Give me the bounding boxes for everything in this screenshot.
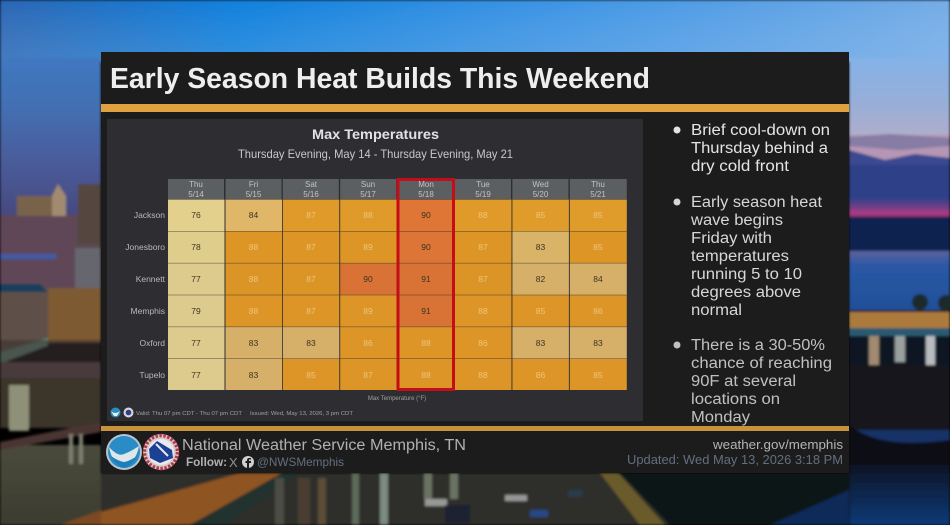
light temperature values: 89 [363, 306, 373, 316]
bullet 3 [674, 337, 832, 426]
column headers: Wed [532, 180, 549, 189]
dark temperature values: 83 [306, 338, 316, 348]
icon: small NWS logo [124, 408, 134, 418]
column headers: 5/18 [418, 190, 434, 199]
light temperature values: 88 [249, 274, 258, 284]
column headers: 5/20 [533, 190, 549, 199]
light temperature values: 87 [478, 242, 488, 252]
icon: NOAA logo [106, 434, 142, 470]
chart subtitle: Thursday Evening, May 14 - Thursday Evening, May 21 [238, 147, 513, 161]
bullet 2 [674, 194, 823, 319]
dark temperature values: 91 [421, 274, 431, 284]
dark temperature values: 84 [593, 274, 603, 284]
light temperature values: 86 [363, 338, 373, 348]
row labels: Jackson [134, 210, 165, 220]
heat table cells [168, 200, 627, 390]
issued date: Issued: Wed, May 13, 2026, 3 pm CDT [250, 411, 353, 417]
light temperature values: 85 [593, 210, 603, 220]
dark temperature values: 77 [191, 338, 201, 348]
dark temperature values: 79 [191, 306, 201, 316]
light temperature values: 87 [306, 210, 316, 220]
light temperature values: 86 [593, 306, 603, 316]
bullet 3: Monday [691, 409, 750, 426]
dark temperature values: 90 [363, 274, 373, 284]
bullet 3: There is a 30-50% [691, 337, 825, 354]
dark temperature values: 83 [593, 338, 603, 348]
light temperature values: 87 [306, 242, 316, 252]
bullet 3: 90F at several [691, 373, 796, 390]
row labels [125, 210, 166, 380]
column headers: Thu [591, 180, 605, 189]
website: weather.gov/memphis [712, 437, 844, 452]
column headers: Sun [361, 180, 375, 189]
light temperature values: 88 [249, 242, 258, 252]
dark temperature values: 77 [191, 274, 201, 284]
light temperature values: 87 [306, 274, 316, 284]
icon: X: X [229, 455, 238, 470]
bullet list [674, 122, 832, 426]
row labels: Memphis [131, 306, 165, 316]
dark temperature values: 90 [421, 242, 431, 252]
icon: NWS logo [143, 434, 179, 470]
dark temperature values: 83 [536, 242, 545, 252]
light temperature values: 86 [536, 370, 545, 380]
row labels: Jonesboro [125, 242, 165, 252]
dark temperature values: 83 [249, 338, 258, 348]
bullet 2: temperatures [691, 248, 789, 265]
row labels: Kennett [136, 274, 166, 284]
column headers: Tue [476, 180, 490, 189]
chart title: Max Temperatures [312, 127, 439, 142]
column headers: Thu [189, 180, 203, 189]
light temperature values: 86 [478, 338, 488, 348]
column headers: Mon [418, 180, 434, 189]
bullet 2: degrees above [691, 284, 801, 301]
column headers: Sat [305, 180, 318, 189]
light temperature values: 88 [421, 338, 431, 348]
title: Early Season Heat Builds This Weekend [110, 63, 650, 95]
light temperature values: 88 [421, 370, 431, 380]
light temperature values: 85 [536, 306, 545, 316]
valid dates: Valid: Thu 07 pm CDT - Thu 07 pm CDT [136, 411, 242, 417]
follow label: Follow: [186, 457, 227, 469]
dark temperature values [191, 210, 603, 380]
dark temperature values: 83 [536, 338, 545, 348]
bullet 1: Thursday behind a [691, 140, 828, 157]
light temperature values: 85 [593, 242, 603, 252]
bullet 2: Early season heat [691, 194, 823, 211]
icon: Facebook [242, 456, 254, 468]
dark temperature values: 78 [191, 242, 201, 252]
light temperature values: 87 [478, 274, 488, 284]
column headers: 5/19 [475, 190, 491, 199]
highlight box: Monday column [398, 180, 454, 390]
column headers: 5/14 [188, 190, 204, 199]
bullet 2: wave begins [690, 212, 783, 229]
light temperature values: 87 [306, 306, 316, 316]
slide panel [101, 52, 849, 473]
dark temperature values: 77 [191, 370, 201, 380]
bullet 2: Friday with [691, 230, 772, 247]
light temperature values: 87 [363, 370, 373, 380]
updated timestamp: Updated: Wed May 13, 2026 3:18 PM [627, 452, 843, 467]
footer [106, 434, 844, 470]
light temperature values: 88 [478, 210, 488, 220]
dark temperature values: 90 [421, 210, 431, 220]
bullet 1 [674, 122, 830, 175]
light temperature values: 85 [593, 370, 603, 380]
light temperature values: 85 [306, 370, 316, 380]
bullet 2: running 5 to 10 [691, 266, 802, 283]
column headers [168, 179, 627, 199]
bottom orange divider [101, 426, 849, 431]
light temperature values: 88 [478, 306, 488, 316]
chart panel: max temperatures [107, 119, 643, 421]
office name: National Weather Service Memphis, TN [182, 437, 466, 454]
dark temperature values: 76 [191, 210, 201, 220]
dark temperature values: 84 [249, 210, 258, 220]
light temperature values: 88 [363, 210, 373, 220]
column headers: 5/21 [590, 190, 606, 199]
light temperature values: 88 [249, 306, 258, 316]
bullet 2: normal [691, 302, 742, 319]
column headers: 5/15 [246, 190, 262, 199]
column headers: 5/16 [303, 190, 319, 199]
column headers: 5/17 [360, 190, 376, 199]
social handle: @NWSMemphis [257, 455, 344, 469]
dark temperature values: 83 [249, 370, 258, 380]
light temperature values: 88 [478, 370, 488, 380]
legend label: Max Temperature (°F) [368, 396, 426, 402]
column headers: Fri [249, 180, 258, 189]
row labels: Oxford [139, 338, 165, 348]
icon: small NOAA logo [110, 408, 120, 418]
bullet 1: Brief cool-down on [691, 122, 830, 139]
dark temperature values: 82 [536, 274, 545, 284]
light temperature values [249, 210, 603, 380]
bullet 3: locations on [691, 391, 780, 408]
row labels: Tupelo [139, 370, 165, 380]
top orange divider [101, 104, 849, 112]
light temperature values: 89 [363, 242, 373, 252]
light temperature values: 85 [536, 210, 545, 220]
bullet 3: chance of reaching [691, 355, 832, 372]
bullet 1: dry cold front [691, 158, 790, 175]
dark temperature values: 91 [421, 306, 431, 316]
